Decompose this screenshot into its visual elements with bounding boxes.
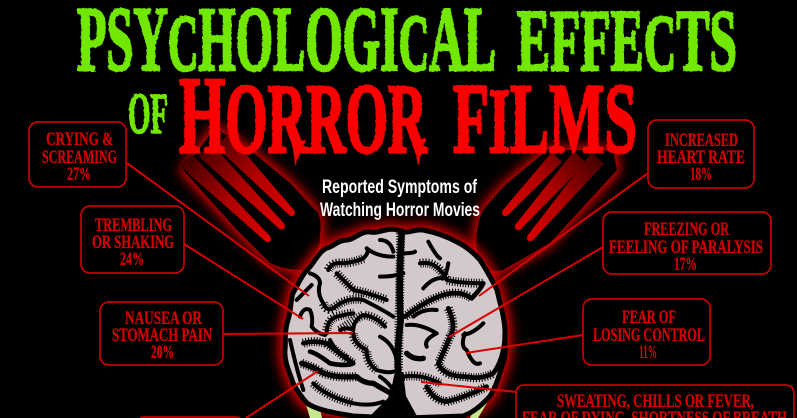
right fork [476,150,617,271]
brain outline [285,229,505,418]
callout: crying and screaming: SCREAMING [42,147,117,168]
title line: Horror Films: FILMS [453,63,637,174]
connector lines [127,163,648,418]
callout: fear of losing control: FEAR OF [622,307,676,328]
title [77,0,737,176]
callout: nausea or stomach pain: STOMACH PAIN [112,325,212,346]
left fork [180,128,321,270]
callout: nausea or stomach pain: 20% [151,342,174,363]
callout: crying and screaming: CRYING & [46,129,113,150]
callout: trembling or shaking: OR SHAKING [92,232,174,253]
title line: Psychological Effects: OF [128,81,168,146]
callout: increased heart rate: HEART RATE [657,147,745,168]
callout: nausea or stomach pain: NAUSEA OR [125,308,202,329]
callout: trembling or shaking [81,206,184,273]
callout: fear of losing control: 11% [639,342,657,363]
callout: crying and screaming [29,122,126,187]
callout: increased heart rate: INCREASED [665,130,738,151]
left hemisphere folds [290,248,398,405]
callout: fear of losing control [583,299,710,365]
callout: freezing or paralysis [603,212,771,275]
brain glow [285,229,505,418]
callout: fear of losing control: LOSING CONTROL [593,325,705,346]
brain stem drips [304,398,490,418]
fork tines [180,134,295,242]
subtitle [320,177,480,221]
subtitle: Watching Horror Movies [320,200,480,221]
callout: partially visible lower left box [140,417,240,418]
title line: Horror Films: HORROR [179,54,428,176]
callout: increased heart rate [648,120,754,188]
brain [285,229,505,418]
callout: increased heart rate: 18% [690,164,712,185]
center fissure base [368,372,418,418]
right hemisphere folds [380,232,505,418]
callout: trembling or shaking: 24% [120,249,144,270]
title line: Psychological Effects [77,0,737,146]
subtitle: Reported Symptoms of [322,177,477,198]
callout: sweating, chills, fever [516,385,794,418]
callout: nausea or stomach pain [100,302,223,365]
callout: crying and screaming: 27% [67,164,91,185]
callout: freezing or paralysis: FREEZING OR [644,219,729,240]
fork tines [502,151,604,241]
callout: trembling or shaking: TREMBLING [95,215,172,236]
callout: freezing or paralysis: 17% [674,254,697,275]
